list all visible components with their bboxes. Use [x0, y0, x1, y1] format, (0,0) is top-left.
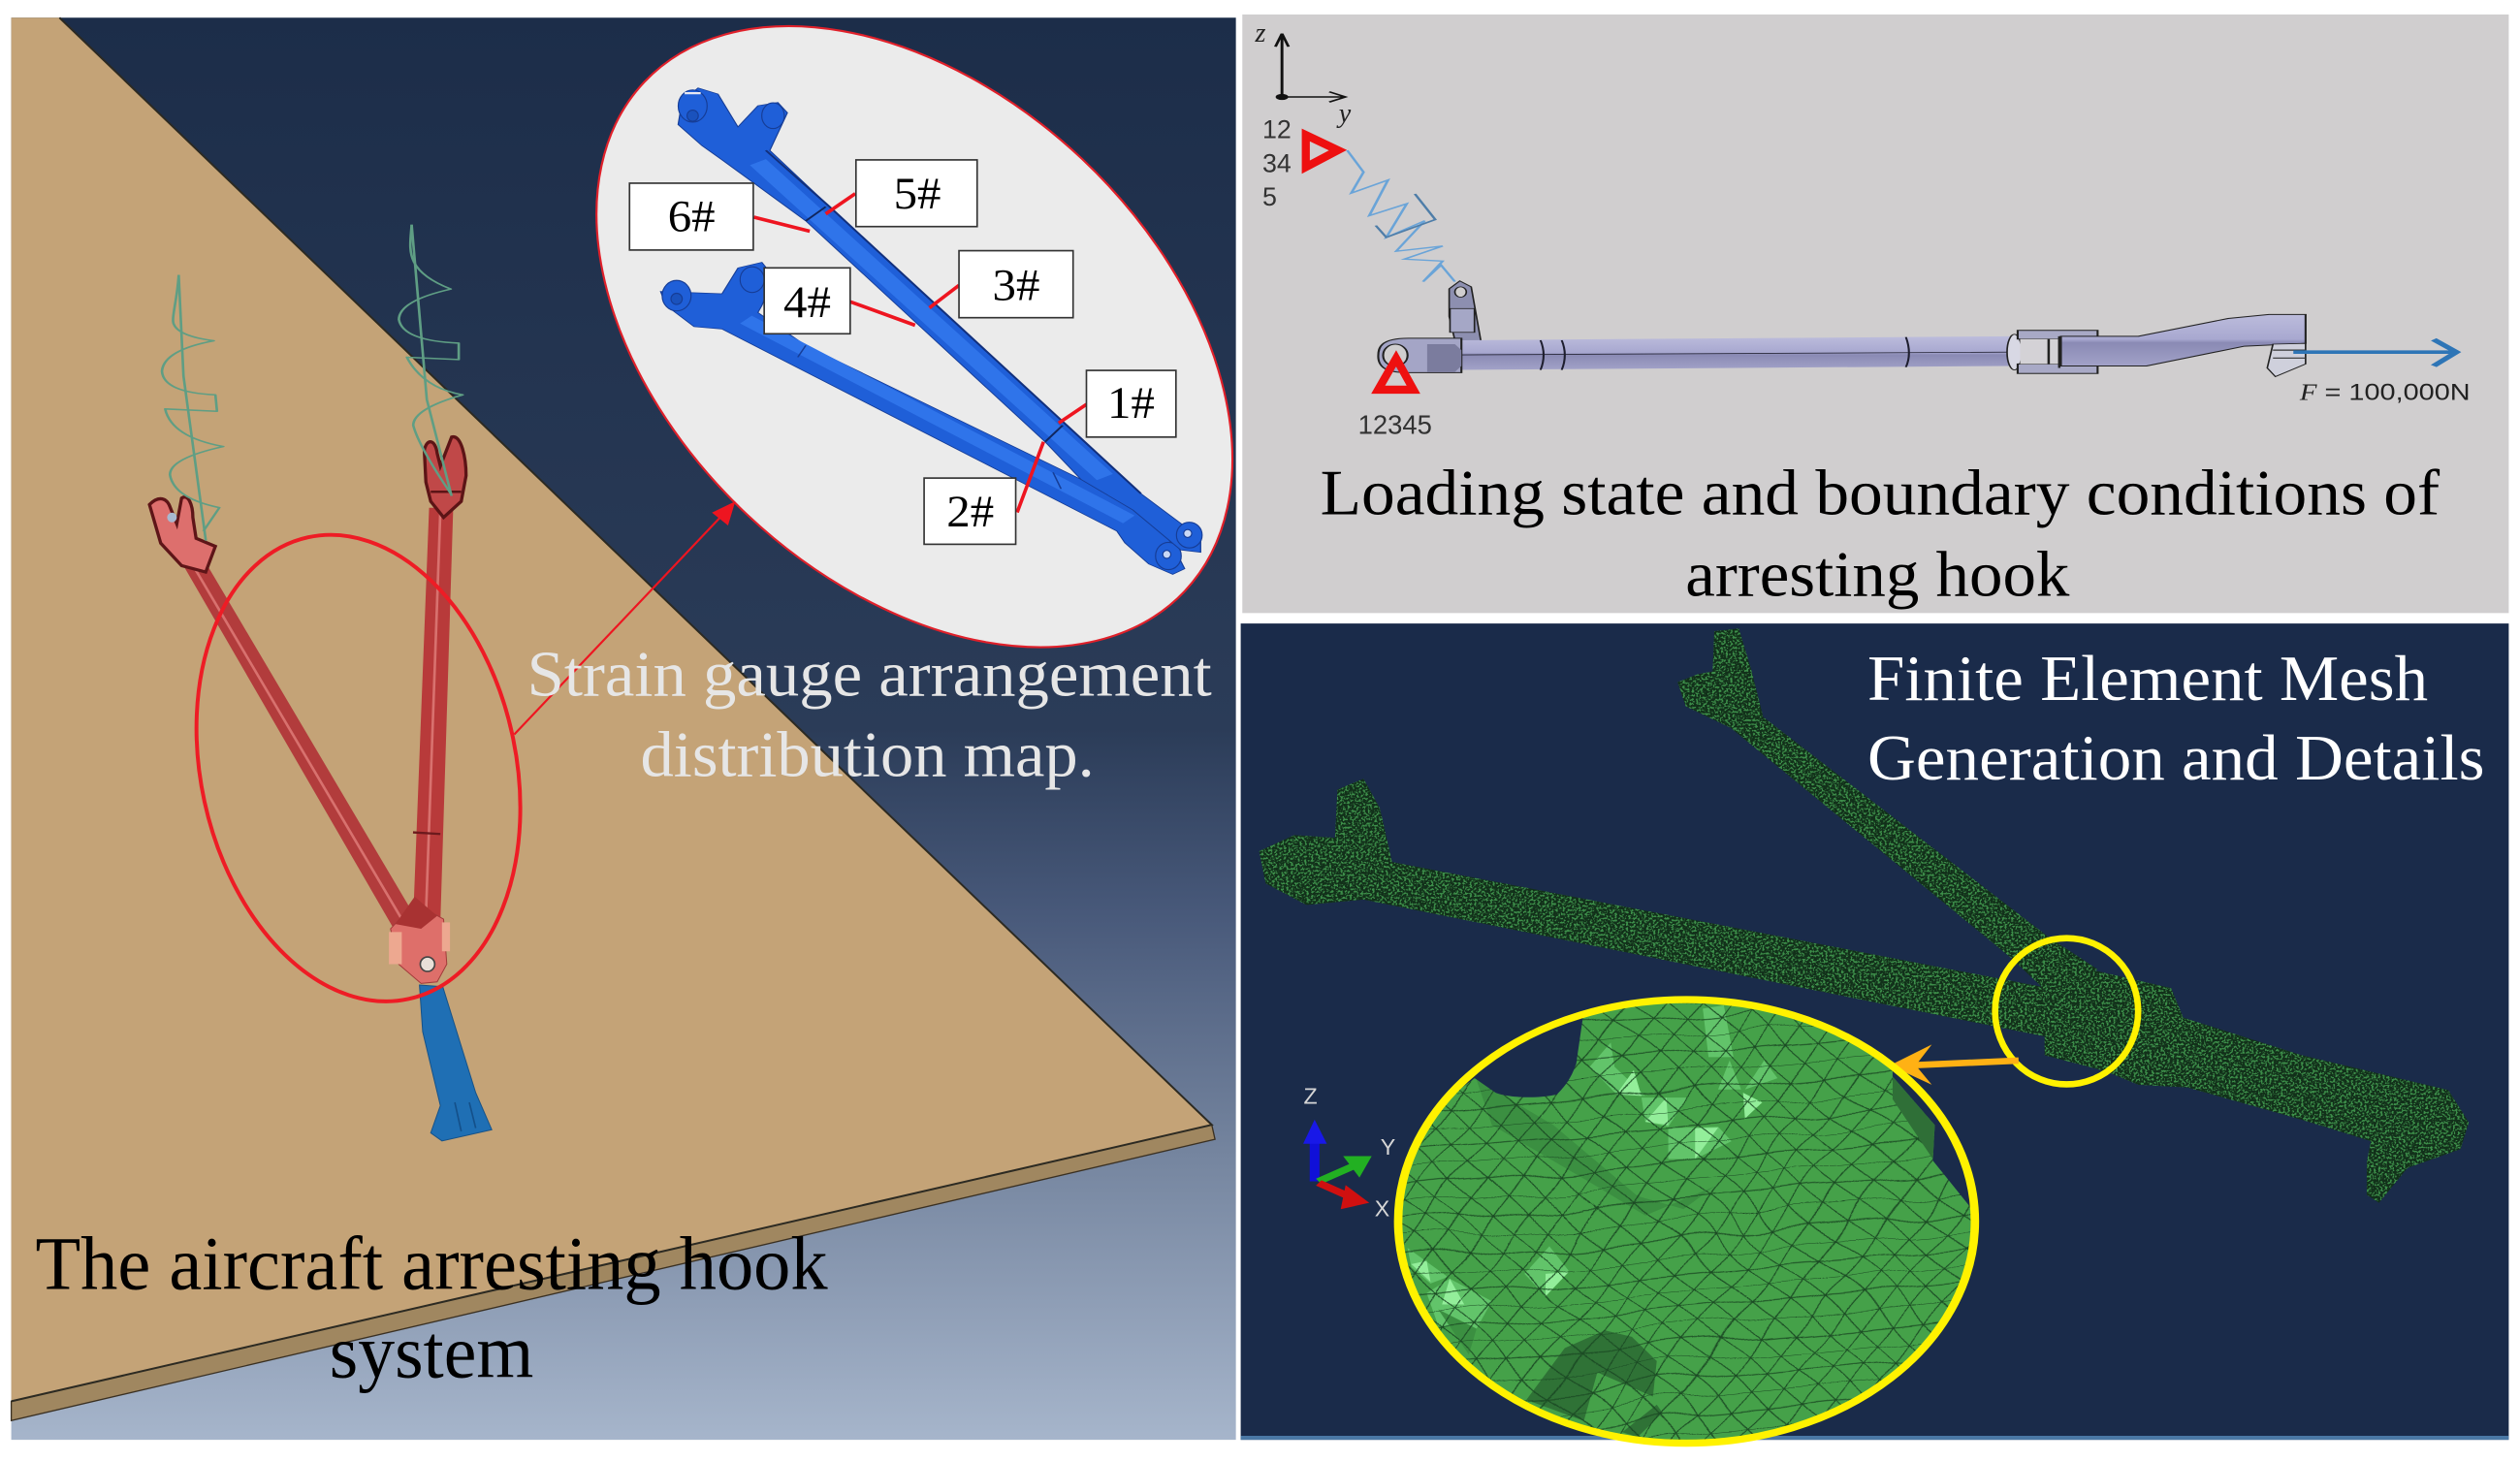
left eye end [1378, 338, 1461, 372]
bright facets [1408, 1005, 1777, 1329]
label 5# [856, 160, 977, 227]
label 12345: 12345 [1358, 410, 1432, 440]
deck plate [12, 17, 1215, 1420]
label 6#: 6# [668, 193, 716, 242]
mid joint [2007, 331, 2097, 373]
icon: xyz triad [1303, 1084, 1395, 1222]
orange arrow [1890, 1044, 2019, 1085]
icon: xyz triad: Y [1381, 1134, 1395, 1160]
upper boundary triangle with labels: 12 [1262, 115, 1292, 144]
coordinate axes: y [1336, 99, 1352, 129]
callout ellipse: strain gauge arrangement [477, 0, 1353, 769]
upper arm fork lobes [678, 90, 1202, 548]
main rod [1461, 336, 2012, 370]
right clevis [425, 437, 466, 518]
left clevis [149, 497, 215, 572]
label 3#: 3# [993, 261, 1039, 310]
heading: arresting hook system [35, 1222, 828, 1393]
heading: finite element mesh: Finite Element Mesh [1867, 644, 2428, 715]
red selection ellipse [154, 504, 562, 1033]
label 4#: 4# [783, 278, 831, 328]
strip beside right notch [1893, 1076, 1934, 1159]
label 6# [629, 183, 753, 250]
icon: xyz triad: Z [1303, 1084, 1318, 1109]
meshed hook model [1260, 628, 2469, 1203]
soft crease [1438, 1080, 1714, 1354]
upper boundary triangle with labels: 34 [1262, 148, 1292, 177]
hook tail [420, 985, 492, 1141]
heading: strain gauge map: Strain gauge arrangement [527, 640, 1212, 711]
upper boundary triangle with labels [1262, 115, 1338, 211]
blue lower arm [660, 263, 1185, 574]
coordinate axes [1255, 18, 1352, 129]
left arm [181, 555, 415, 929]
panel background [12, 17, 1236, 1440]
arrester springs [162, 225, 463, 541]
icon: xyz triad: X [1375, 1196, 1389, 1222]
yellow ring [1398, 1000, 1975, 1444]
green surface [1402, 1002, 1970, 1440]
hook tip [2267, 343, 2306, 376]
panel: loading state and boundary conditions [1242, 15, 2508, 613]
spring [1347, 150, 1454, 282]
heading: arresting hook system: The aircraft arresting hook [35, 1222, 828, 1305]
heading: strain gauge map [527, 640, 1212, 791]
enlarged mesh detail [1394, 996, 1980, 1446]
panel background [1242, 15, 2508, 613]
hook head [2061, 314, 2306, 366]
label 3# [959, 251, 1073, 318]
upper boundary triangle with labels: 5 [1262, 182, 1277, 211]
heading: finite element mesh [1867, 644, 2485, 794]
heading: loading state: Loading state and boundary conditions of [1321, 458, 2440, 528]
small yellow detail circle [1995, 938, 2138, 1084]
pivot block [389, 897, 450, 983]
hook assembly in red and blue [149, 437, 492, 1141]
label 5#: 5# [894, 170, 941, 219]
blue upper arm [678, 88, 1202, 553]
coordinate axes: z [1255, 18, 1266, 48]
heading: arresting hook system: system [330, 1310, 533, 1393]
label 2# [924, 478, 1016, 544]
lightest facets [1412, 1070, 1762, 1305]
force label: F = 100,000N [2299, 380, 2471, 406]
arrow: selection to callout [514, 501, 735, 734]
label 2#: 2# [946, 488, 994, 537]
panel: finite element mesh [1241, 623, 2508, 1462]
label 1# [1086, 370, 1176, 437]
background notches [1462, 1018, 1970, 1206]
lower boundary triangle [1378, 359, 1414, 390]
heading: loading state: arresting hook [1685, 539, 2070, 610]
heading: strain gauge map: distribution map. [641, 720, 1095, 791]
lower arm fork lobes [662, 267, 1181, 570]
hook arm side view [1378, 281, 2306, 376]
label 1#: 1# [1107, 379, 1155, 429]
heading: loading state [1321, 458, 2440, 610]
gauge leader lines [754, 194, 1087, 512]
right arm [413, 508, 453, 922]
panel: aircraft arresting hook system [12, 0, 1353, 1440]
shaded recesses [1526, 1330, 1663, 1437]
upper bracket [1450, 281, 1482, 346]
label 4# [764, 268, 850, 334]
arrow: applied force [2293, 339, 2456, 366]
panel background [1241, 623, 2508, 1440]
heading: finite element mesh: Generation and Details [1867, 723, 2485, 794]
triangular mesh lines [1402, 1002, 1970, 1440]
